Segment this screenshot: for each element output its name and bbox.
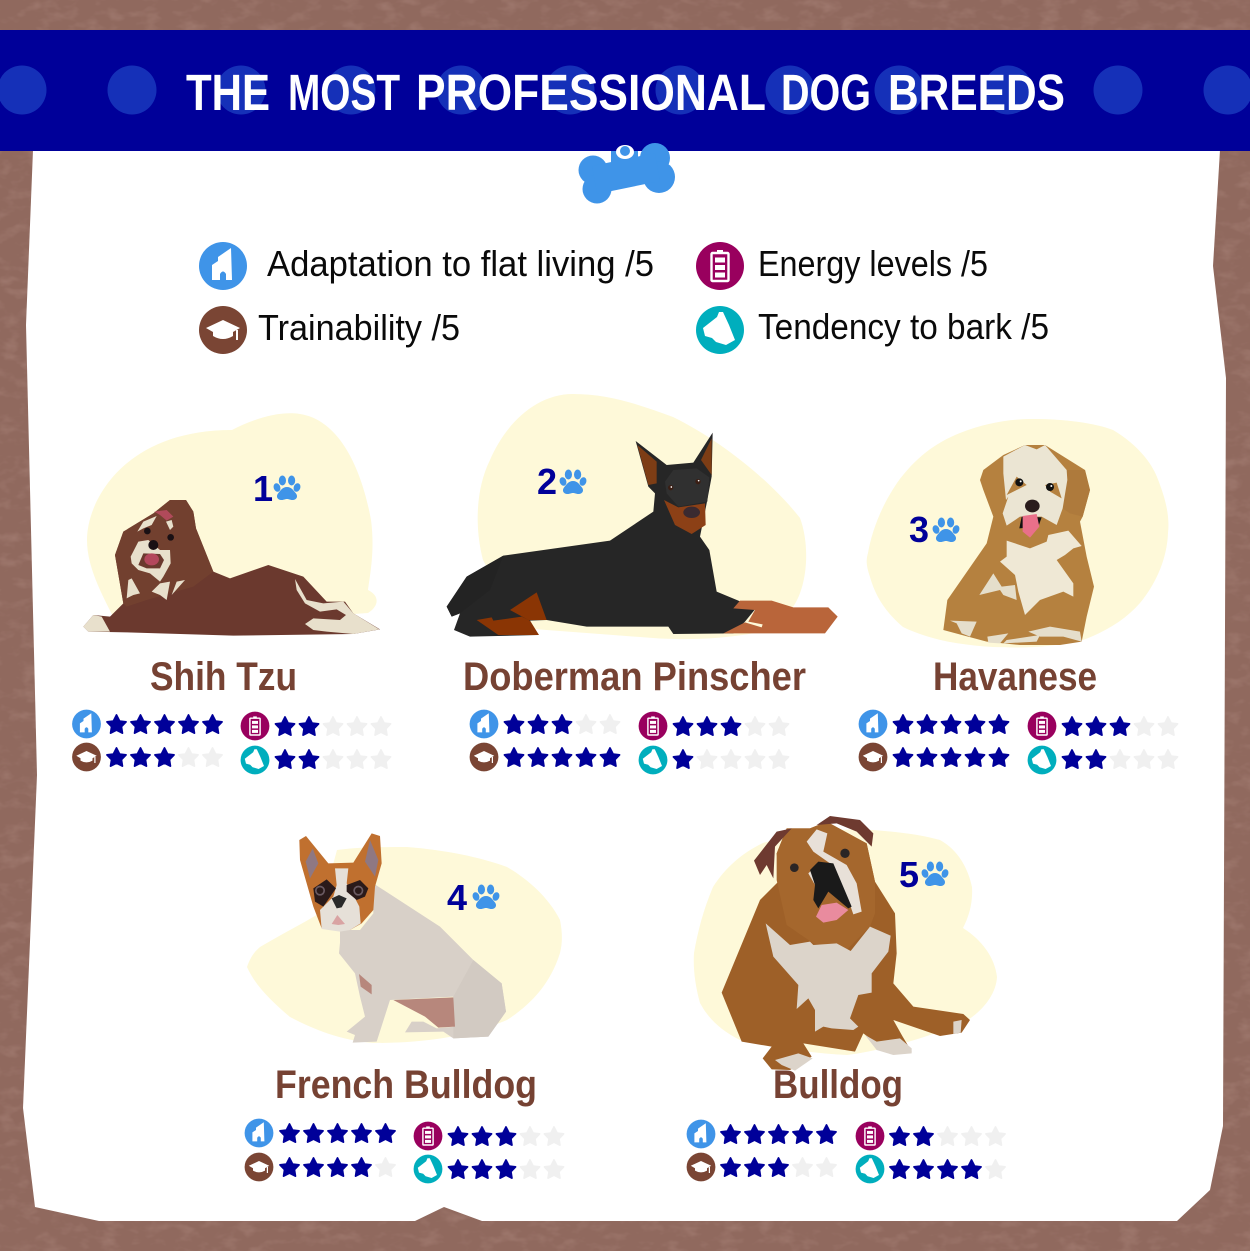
icon: energy [696, 242, 744, 290]
backdrop blob [478, 394, 806, 639]
title: DOG [781, 64, 871, 121]
icon: paw [920, 862, 950, 886]
legend [199, 242, 1049, 354]
panel: French Bulldog [245, 833, 564, 1183]
ratings [245, 1119, 564, 1183]
legend label: bark: Tendency to bark /5 [758, 306, 1049, 347]
breed name: Shih Tzu [150, 655, 297, 699]
ratings [72, 710, 390, 774]
rank 3: 3 [909, 509, 929, 550]
illustration: Doberman [447, 433, 838, 637]
backdrop blob [87, 413, 377, 630]
backdrop blob [694, 830, 997, 1055]
icon: bone [578, 143, 675, 204]
ratings [470, 710, 788, 774]
ratings [859, 710, 1178, 774]
breed name: Bulldog [773, 1063, 903, 1107]
title: THE [186, 64, 270, 121]
illustration: Shih Tzu [83, 500, 380, 636]
rank 4: 4 [447, 877, 467, 918]
breed name: Havanese [933, 655, 1097, 699]
icon: paw [471, 884, 501, 909]
icon: paw [272, 476, 302, 500]
rank 1: 1 [253, 468, 273, 509]
title: MOST [288, 64, 400, 121]
breed name: French Bulldog [275, 1063, 537, 1107]
title: PROFESSIONAL [416, 64, 766, 121]
icon: trainability [199, 306, 247, 354]
rank 5: 5 [899, 854, 919, 895]
ratings [687, 1120, 1005, 1183]
legend label: energy: Energy levels /5 [758, 243, 988, 284]
panel: Shih Tzu [72, 413, 390, 774]
backdrop blob [247, 847, 562, 1043]
legend label: adaptation: Adaptation to flat living /5 [267, 243, 654, 284]
title banner [0, 30, 1250, 151]
icon: paw [558, 470, 588, 494]
panel: Havanese [859, 419, 1178, 774]
legend label: trainability: Trainability /5 [258, 307, 460, 348]
icon: bark [696, 306, 744, 354]
illustration: Havanese [943, 445, 1094, 645]
icon: flat living [199, 242, 247, 290]
illustration: Bulldog [722, 816, 970, 1071]
rank 2: 2 [537, 461, 557, 502]
backdrop blob [867, 419, 1168, 647]
breed name: Doberman Pinscher [463, 655, 806, 699]
icon: paw [931, 518, 961, 542]
title [186, 64, 1065, 121]
title: BREEDS [888, 64, 1065, 121]
panel: Doberman Pinscher [447, 394, 838, 774]
panel: Bulldog [687, 816, 1005, 1183]
illustration: French Bulldog [299, 833, 506, 1043]
